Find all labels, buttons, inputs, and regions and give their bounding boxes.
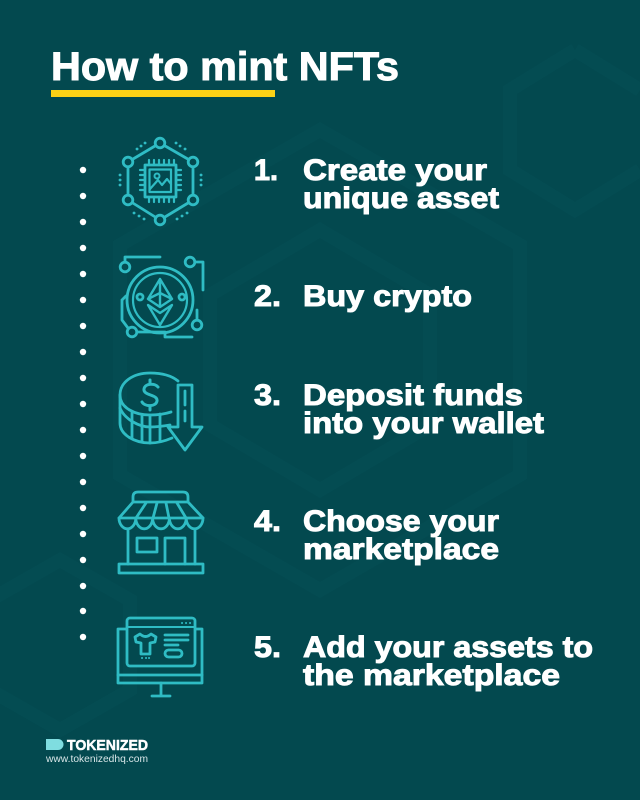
step 3 text: 3. — [254, 379, 281, 412]
icon: logo mark — [46, 739, 64, 750]
step 4 text: 4. — [254, 505, 281, 538]
logo and website: TOKENIZED — [67, 737, 148, 754]
step 3 text — [254, 379, 544, 440]
step 4 text: marketplace — [303, 533, 499, 566]
step 5 text — [254, 631, 593, 692]
icon: chip with image — [120, 138, 201, 225]
step 3 text: Deposit funds — [303, 379, 523, 412]
step 4 text — [254, 505, 499, 566]
icon: ethereum coin with circuit — [120, 257, 203, 337]
step 1 text: 1. — [254, 154, 278, 187]
logo and website: www.tokenizedhq.com — [45, 753, 148, 765]
step 1 text: Create your — [303, 154, 487, 187]
step 2 text: Buy crypto — [303, 280, 472, 313]
icon: online shop on monitor — [118, 618, 202, 696]
icon: coins with down arrow — [120, 373, 202, 450]
step 4 text: Choose your — [303, 505, 499, 538]
logo and website — [45, 737, 148, 765]
step 5 text: Add your assets to — [303, 631, 593, 664]
step 1 text: unique asset — [303, 182, 499, 215]
icon: marketplace storefront — [119, 492, 203, 573]
step 5 text: 5. — [254, 631, 281, 664]
step 2 text: 2. — [254, 280, 281, 313]
step 1 text — [254, 154, 499, 215]
step 3 text: into your wallet — [303, 407, 544, 440]
step 5 text: the marketplace — [303, 659, 560, 692]
title underline — [51, 90, 275, 97]
dotted timeline — [80, 167, 86, 640]
title: How to mint NFTs — [51, 45, 399, 89]
